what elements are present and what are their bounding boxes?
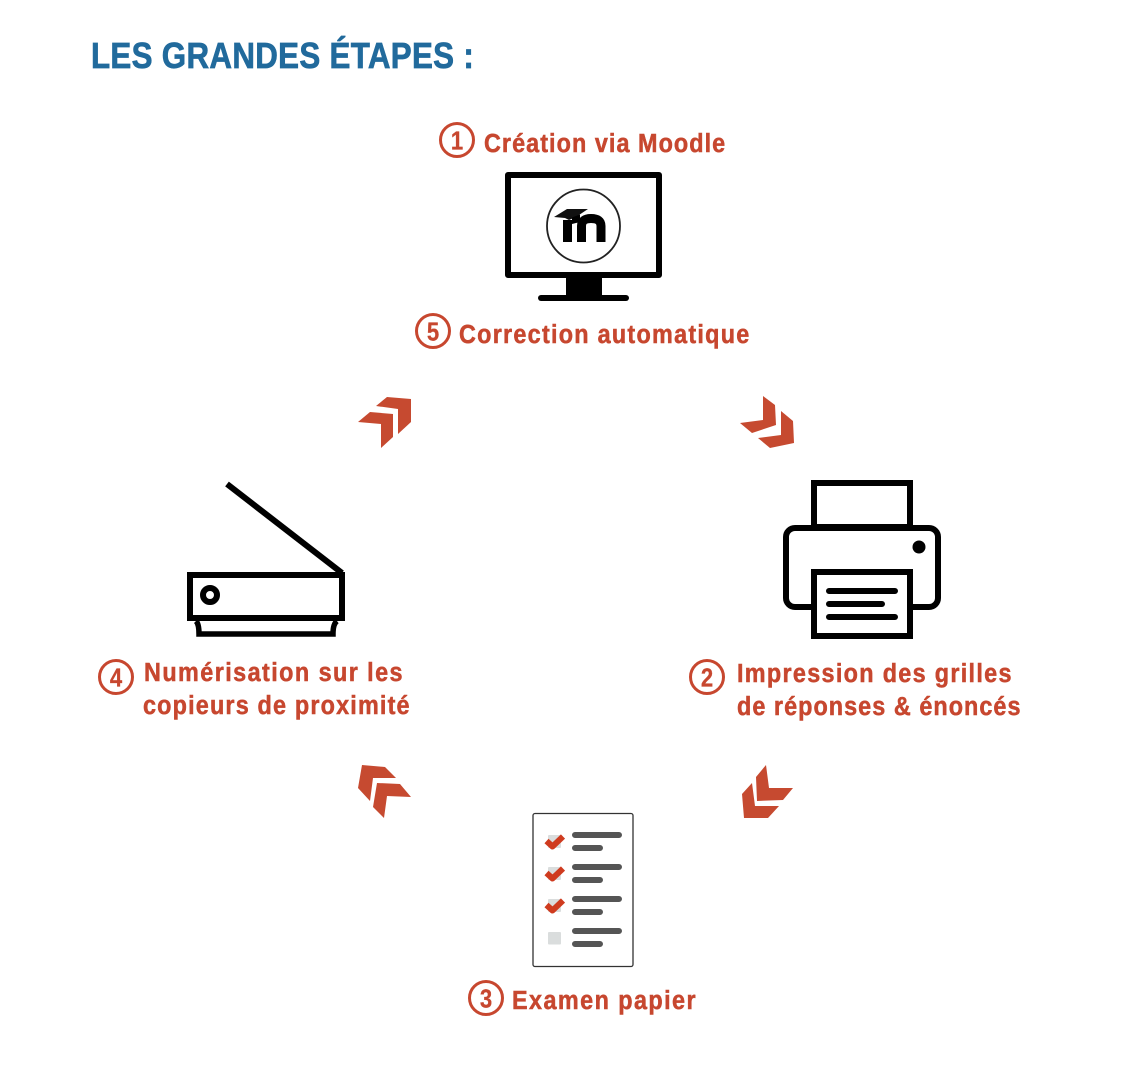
arrow: step 4 to step 5: [358, 397, 411, 448]
step 5 label: Correction automatique: 5: [427, 318, 439, 347]
step 5 label: Correction automatique: Correction automatique: [459, 321, 749, 349]
step 3 label: Examen papier: [470, 982, 696, 1015]
step 1 label: Création via Moodle: 1: [451, 127, 463, 156]
step 2 label: Impression des grilles de réponses & énoncés: 2: [701, 664, 713, 693]
arrow: step 1 to step 2: [740, 396, 794, 448]
step 2 label: Impression des grilles de réponses & énoncés: Impression des grilles: [737, 660, 1012, 688]
arrow: step 2 to step 3: [742, 765, 793, 818]
step 4 label: Numérisation sur les copieurs de proximité: Numérisation sur les: [144, 659, 403, 687]
step 3 label: Examen papier: 3: [480, 985, 492, 1014]
title: LES GRANDES ÉTAPES :: [91, 36, 474, 77]
step 4 label: Numérisation sur les copieurs de proximité: [100, 659, 410, 720]
step 3 label: Examen papier: Examen papier: [512, 987, 696, 1015]
step 1 label: Création via Moodle: [440, 124, 725, 158]
icon: monitor with Moodle logo: [508, 175, 659, 301]
icon: exam paper checklist: [533, 814, 633, 966]
step 4 label: Numérisation sur les copieurs de proximité: copieurs de proximité: [143, 692, 410, 720]
step 1 label: Création via Moodle: Création via Moodle: [484, 130, 725, 158]
step 4 label: Numérisation sur les copieurs de proximité: 4: [110, 664, 123, 693]
step 2 label: Impression des grilles de réponses & énoncés: [690, 660, 1021, 721]
arrow: step 3 to step 4: [358, 765, 411, 818]
icon: scanner: [190, 484, 342, 634]
step 2 label: Impression des grilles de réponses & énoncés: de réponses & énoncés: [737, 693, 1021, 721]
icon: printer: [786, 483, 938, 636]
